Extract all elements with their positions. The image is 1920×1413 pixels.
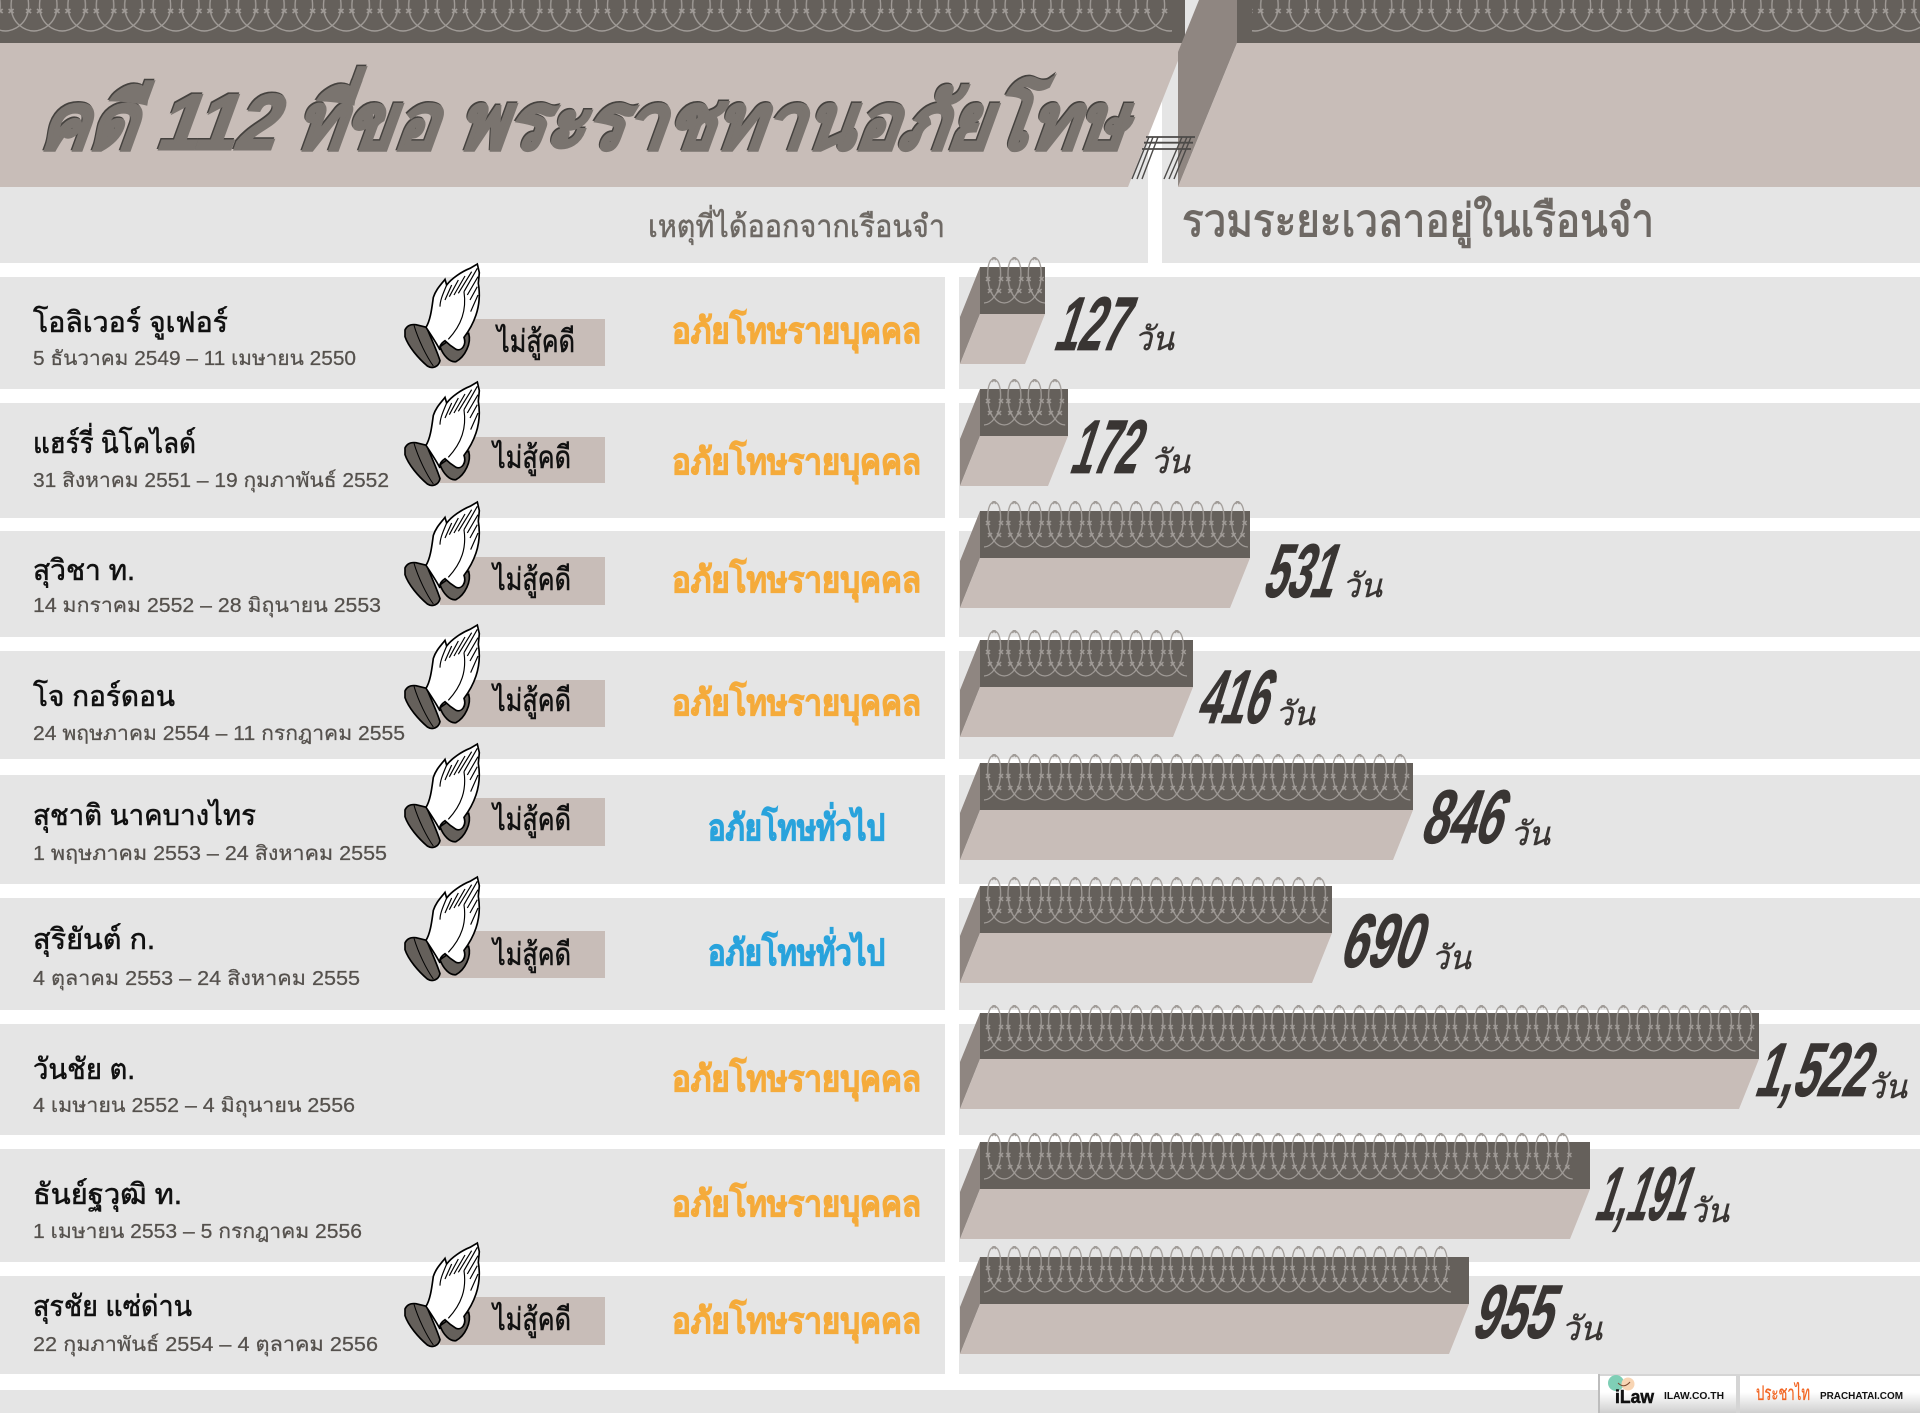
value: 846 [1414,774,1521,860]
unit: วัน [1275,695,1316,732]
dates: 4 เมษายน 2552 – 4 มิถุนายน 2556 [33,1095,355,1118]
tag: no contest [440,557,605,605]
iLaw url: ILAW.CO.TH [1664,1390,1724,1402]
name: โอลิเวอร์ จูเฟอร์ [33,305,228,340]
unit: วัน [1561,1310,1603,1347]
release reason: อภัยโทษรายบุคคล [672,1057,921,1102]
tag: no contest [440,319,605,366]
release reason: อภัยโทษรายบุคคล [672,440,921,485]
tag text: ไม่สู้คดี [491,1302,571,1338]
icon: praying hands [405,877,479,980]
name: โจ กอร์ดอน [33,679,175,713]
icon: fence [1132,137,1195,179]
row: Wanchai T. [33,1005,1908,1118]
title: คดี 112 ที่ขอ พระราชทานอภัยโทษ [32,67,1154,166]
bar: 846 days [960,754,1413,860]
value: 127 [1047,281,1145,367]
bar: 531 days [960,501,1250,608]
tag: no contest [440,1297,605,1345]
dates: 24 พฤษภาคม 2554 – 11 กรกฎาคม 2555 [33,723,405,745]
heading: total time in prison: รวมระยะเวลาอยู่ในเรือนจำ [1182,195,1654,248]
row: Surachai Saedan [33,1243,1603,1357]
dates: 1 เมษายน 2553 – 5 กรกฎาคม 2556 [33,1221,362,1243]
name: วันชัย ต. [33,1054,135,1086]
value: 955 [1465,1269,1571,1355]
dates: 4 ตุลาคม 2553 – 24 สิงหาคม 2555 [33,968,360,991]
dates: 14 มกราคม 2552 – 28 มิถุนายน 2553 [33,595,381,618]
title: คดี 112 ที่ขอ พระราชทานอภัยโทษ [31,65,1153,165]
row: Suchart Nakbangsai [33,744,1551,865]
release reason: อภัยโทษรายบุคคล [672,1299,921,1344]
icon: praying hands [405,625,479,728]
tag text: ไม่สู้คดี [495,324,575,360]
tag text: ไม่สู้คดี [491,802,571,838]
bar: 955 days [960,1246,1469,1354]
bar: 1,191 days [960,1133,1590,1239]
tag: no contest [440,437,605,483]
name: สุวิชา ท. [33,555,135,588]
panel: header [0,0,1920,263]
icon: iLaw logo: iLaw [1615,1387,1655,1407]
bar: 416 days [960,630,1193,737]
Prachatai logo: ประชาไท [1756,1382,1810,1405]
value: 1,191 [1588,1151,1707,1237]
release reason: อภัยโทษรายบุคคล [672,309,921,354]
dates: 31 สิงหาคม 2551 – 19 กุมภาพันธ์ 2552 [33,469,389,493]
name: ธันย์ฐวุฒิ ท. [33,1178,182,1212]
dates: 5 ธันวาคม 2549 – 11 เมษายน 2550 [33,348,356,370]
tag: no contest [440,680,605,727]
tag: no contest [440,798,605,846]
unit: วัน [1867,1068,1908,1105]
row: Suwicha T. [33,501,1383,618]
release reason: อภัยโทษรายบุคคล [672,558,921,603]
bar: 690 days [960,877,1332,983]
tag text: ไม่สู้คดี [491,937,571,973]
name: สุริยันต์ ก. [33,923,155,957]
bar: 1,522 days [960,1005,1759,1109]
heading: release reason: เหตุที่ได้ออกจากเรือนจำ [648,205,945,246]
row: Suriyan K. [33,877,1472,991]
unit: วัน [1689,1192,1730,1229]
value: 172 [1063,404,1157,490]
row: Oliver Jufer [33,257,1175,370]
dates: 22 กุมภาพันธ์ 2554 – 4 ตุลาคม 2556 [33,1333,378,1357]
tag text: ไม่สู้คดี [491,683,571,719]
tag: no contest [440,931,605,978]
icon: praying hands [405,744,479,847]
icon: praying hands [405,382,479,485]
row: Harry Nicolaides [33,379,1191,493]
unit: วัน [1342,567,1383,604]
tag text: ไม่สู้คดี [491,440,571,476]
unit: วัน [1431,939,1472,976]
unit: วัน [1150,443,1191,480]
bar: 127 days [960,257,1045,364]
release reason: อภัยโทษรายบุคคล [672,1182,921,1227]
release reason: อภัยโทษรายบุคคล [672,681,921,726]
release reason: อภัยโทษทั่วไป [708,927,885,973]
icon: iLaw logo [1608,1375,1655,1407]
release reason: อภัยโทษทั่วไป [708,802,885,848]
icon: praying hands [405,502,479,605]
name: สุชาติ นาคบางไทร [33,798,256,833]
value: 531 [1256,528,1353,614]
dates: 1 พฤษภาคม 2553 – 24 สิงหาคม 2555 [33,843,387,865]
row: Thanthawut T. [33,1133,1730,1243]
unit: วัน [1134,320,1175,357]
icon: praying hands [405,1243,479,1346]
row: Joe Gordon [33,625,1316,745]
tag text: ไม่สู้คดี [491,562,571,598]
Prachatai url: PRACHATAI.COM [1820,1390,1903,1402]
name: แฮร์รี่ นิโคไลด์ [33,423,196,460]
unit: วัน [1510,815,1551,852]
value: 416 [1190,654,1287,740]
icon: praying hands [405,264,479,367]
value: 690 [1333,898,1440,984]
bar: 172 days [960,379,1068,486]
footer: logos [1598,1374,1920,1413]
name: สุรชัย แซ่ด่าน [33,1291,192,1324]
